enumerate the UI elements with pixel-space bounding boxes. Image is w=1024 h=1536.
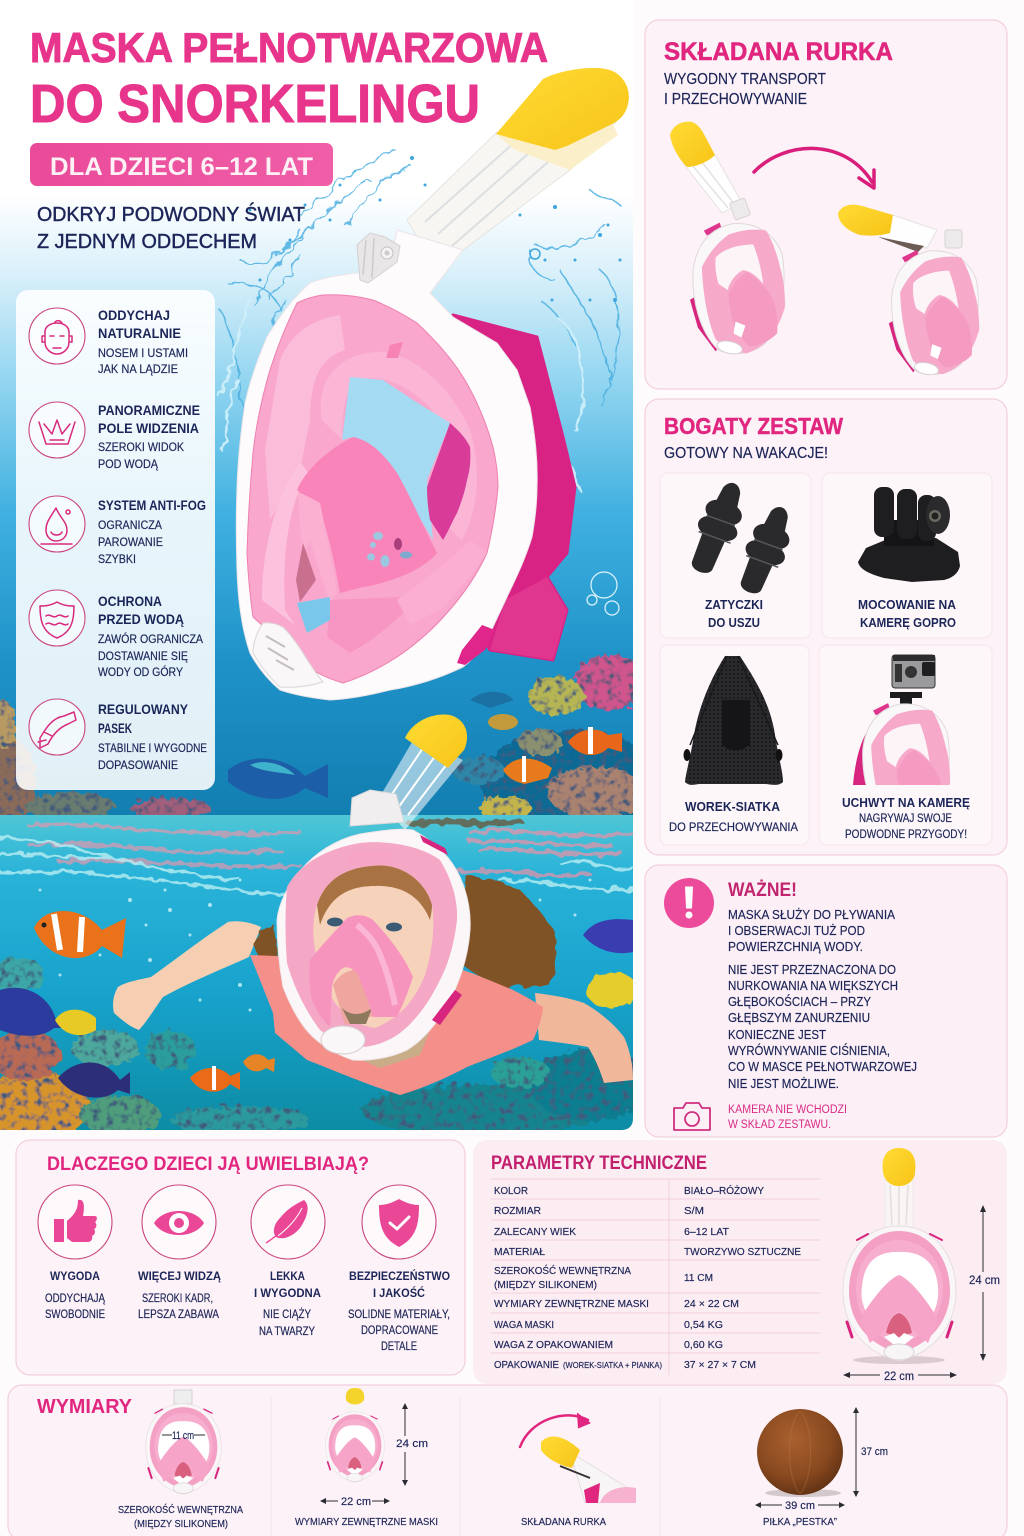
tagline (37, 202, 305, 253)
mask with tube up (670, 122, 785, 356)
card: gopro mount (822, 473, 992, 638)
strap through lens (427, 423, 470, 540)
panel: features (16, 290, 215, 790)
strap (453, 315, 575, 660)
card: mesh bag: DO PRZECHOWYWANIA (669, 820, 798, 834)
nose cup (297, 437, 437, 593)
mouth (333, 970, 373, 1025)
mask front with dimensions (843, 1148, 1000, 1383)
benefit: light: NA TWARZY (259, 1326, 315, 1338)
splash droplets (248, 156, 622, 316)
bubbles near strap (587, 572, 619, 615)
fish: large blue fish (228, 759, 328, 799)
panel: technical parameters (473, 1140, 1007, 1384)
subheading: I PRZECHOWYWANIE (664, 91, 807, 108)
specification table: MATERIAŁ (494, 1246, 545, 1258)
underwater background (0, 214, 633, 815)
fish: clownfish on coral right (568, 727, 622, 755)
subheading: GOTOWY NA WAKACJE! (664, 445, 828, 462)
feature: water protection: DOSTAWANIE SIĘ (98, 651, 188, 663)
card: camera holder: UCHWYT NA KAMERĘ (842, 795, 970, 810)
dark gap (296, 543, 316, 602)
fish: small clownfish (190, 1066, 240, 1092)
benefit: comfort (38, 1185, 112, 1321)
fish silhouette (470, 692, 514, 708)
specification table: WAGA MASKI (494, 1319, 554, 1331)
heading: WAŻNE! (728, 880, 797, 901)
camera note (728, 1104, 847, 1131)
notice text: I OBSERWACJI TUŻ POD (728, 923, 865, 938)
folding illustration: SKŁADANA RURKA (521, 1516, 606, 1528)
eyes (327, 918, 402, 932)
specification table: 0,60 KG (684, 1339, 723, 1351)
feature: breathe (29, 307, 188, 376)
hero image panel (0, 68, 633, 1130)
side of nose cup (298, 492, 337, 603)
feature: anti-fog: SZYBKI (98, 554, 136, 566)
feature: breathe: ODDYCHAJ (98, 307, 170, 323)
feature: strap: DOPASOWANIE (98, 760, 178, 772)
panel: why kids love it (16, 1140, 465, 1375)
tagline: ODKRYJ PODWODNY ŚWIAT (37, 202, 305, 226)
feature: breathe: NATURALNIE (98, 325, 181, 341)
inner width: (MIĘDZY SILIKONEM) (134, 1518, 228, 1530)
fish: dark blue bottom (58, 1062, 130, 1098)
specification table: ZALECANY WIEK (494, 1226, 576, 1238)
notice text (728, 907, 917, 1091)
specification table: 37 × 27 × 7 CM (684, 1359, 756, 1371)
strap clip (457, 625, 495, 665)
panel: folding snorkel (645, 20, 1007, 389)
pink lens rim (286, 842, 457, 1047)
panel: important notice (645, 865, 1007, 1137)
heading: PARAMETRY TECHNICZNE (491, 1153, 707, 1174)
ball: 39 cm (785, 1500, 815, 1512)
inner width (118, 1390, 243, 1530)
ball: PIŁKA „PESTKA” (763, 1516, 837, 1528)
camera (890, 655, 935, 706)
folding illustration (520, 1413, 636, 1528)
fish: yellow right (586, 972, 638, 1008)
notice text: NIE JEST MOŻLIWE. (728, 1076, 839, 1091)
hair in lens (317, 865, 432, 925)
outer dimensions: 22 cm (341, 1496, 371, 1508)
specification table: (WOREK-SIATKA + PIANKA) (563, 1360, 662, 1370)
notice text: NIE JEST PRZEZNACZONA DO (728, 962, 896, 977)
benefit: comfort: SWOBODNIE (45, 1309, 105, 1321)
translucent cap section (496, 122, 618, 170)
feature: anti-fog: OGRANICZA (98, 520, 162, 532)
feature: panorama: POLE WIDZENIA (98, 420, 199, 436)
child hair (253, 875, 557, 987)
specification table: WYMIARY ZEWNĘTRZNE MASKI (494, 1298, 649, 1310)
specification table: 11 CM (684, 1272, 713, 1284)
feature: panorama: SZEROKI WIDOK (98, 442, 184, 454)
blue window (342, 377, 450, 540)
camera note: KAMERA NIE WCHODZI (728, 1104, 847, 1116)
specification table: KOLOR (494, 1185, 528, 1197)
age badge: DLA DZIECI 6–12 LAT (50, 153, 313, 181)
yellow cap (405, 714, 467, 768)
pink lens (247, 295, 498, 683)
specification table: BIAŁO–RÓŻOWY (684, 1184, 764, 1197)
feature: strap: REGULOWANY (98, 701, 189, 717)
outer dimensions: WYMIARY ZEWNĘTRZNE MASKI (295, 1516, 438, 1528)
big mask side view (236, 68, 629, 700)
small striped fish (488, 714, 518, 730)
heading: WYMIARY (37, 1396, 133, 1418)
specification table: SZEROKOŚĆ WEWNĘTRZNA (494, 1264, 631, 1277)
icon: exclamation (664, 878, 714, 928)
card: earplugs (660, 473, 811, 638)
mask with tube folded (838, 205, 979, 377)
camera mount (350, 790, 404, 826)
benefit: light (251, 1185, 325, 1338)
fish: purple right (583, 919, 633, 953)
blue gap (297, 597, 330, 633)
arrow (754, 148, 874, 188)
heading: BOGATY ZESTAW (664, 413, 843, 439)
flower vents (367, 532, 412, 567)
benefit: better view: SZEROKI KADR, (142, 1293, 213, 1305)
feature: anti-fog: SYSTEM ANTI-FOG (98, 497, 206, 513)
notice text: WYRÓWNYWANIE CIŚNIENIA, (728, 1043, 890, 1058)
face (313, 865, 433, 1028)
ball (755, 1407, 888, 1528)
benefit: better view: LEPSZA ZABAWA (138, 1309, 219, 1321)
sea scene below water surface (0, 815, 633, 1135)
specification table: TWORZYWO SZTUCZNE (684, 1246, 801, 1258)
bubbles (38, 878, 592, 1012)
specification table: 6–12 LAT (684, 1226, 730, 1238)
ball: 37 cm (861, 1446, 888, 1458)
feature: anti-fog (29, 496, 206, 566)
notice text: CO W MASCE PEŁNOTWARZOWEJ (728, 1059, 917, 1074)
right bar (397, 540, 487, 625)
heading: SKŁADANA RURKA (664, 38, 893, 66)
fish: purple blue left (0, 988, 62, 1036)
feature: water protection: OCHRONA (98, 593, 162, 609)
lower mask with child (277, 714, 470, 1060)
feature: breathe: JAK NA LĄDZIE (98, 364, 178, 376)
notice text: POWIERZCHNIĄ WODY. (728, 939, 863, 954)
outer dimensions: 24 cm (396, 1438, 428, 1450)
water surface reflections (0, 822, 633, 895)
specification table: WAGA Z OPAKOWANIEM (494, 1339, 613, 1351)
top clip (348, 851, 394, 865)
snorkel tube (407, 122, 616, 275)
camera note: W SKŁAD ZESTAWU. (728, 1119, 831, 1131)
card: camera holder: PODWODNE PRZYGODY! (845, 829, 967, 841)
specification table: OPAKOWANIE (494, 1359, 559, 1371)
clip top (420, 835, 448, 855)
yellow cap (496, 68, 629, 150)
feature: water protection: WODY OD GÓRY (98, 666, 183, 679)
benefit: safety: I JAKOŚĆ (373, 1287, 425, 1300)
specification table: 24 × 22 CM (684, 1298, 739, 1310)
feature: panorama: POD WODĄ (98, 459, 158, 471)
fish: yellow left (55, 1010, 96, 1035)
benefit: safety: BEZPIECZEŃSTWO (349, 1270, 450, 1283)
subheading: WYGODNY TRANSPORT (664, 71, 826, 88)
upper frame band (321, 352, 477, 540)
feature: breathe: NOSEM I USTAMI (98, 348, 188, 360)
lower mask part (327, 597, 403, 653)
strap lower section (490, 577, 567, 660)
card: mesh bag: WOREK-SIATKA (685, 799, 781, 814)
benefit: light: LEKKA (270, 1271, 305, 1283)
card: gopro mount: MOCOWANIE NA (858, 597, 957, 612)
benefit: safety (348, 1185, 450, 1353)
specification table (491, 1179, 820, 1375)
icon: camera (674, 1103, 710, 1130)
tube (383, 742, 463, 829)
mask front with dimensions: 24 cm (969, 1275, 1000, 1287)
nose piece (309, 915, 413, 1027)
notice text: NURKOWANIA NA WIĘKSZYCH (728, 978, 898, 993)
title (30, 24, 548, 134)
coral reef band (0, 653, 633, 815)
card: gopro mount: KAMERĘ GOPRO (860, 615, 956, 630)
panel: dimensions (8, 1385, 1007, 1536)
coral bottom (0, 957, 650, 1139)
heading: DLACZEGO DZIECI JĄ UWIELBIAJĄ? (47, 1153, 369, 1175)
exhaust valve (253, 623, 323, 687)
child arm right (535, 993, 633, 1083)
feature: water protection: ZAWÓR OGRANICZA (98, 633, 203, 646)
feature: strap: PASEK (98, 720, 132, 736)
subheading (664, 71, 826, 108)
specification table: S/M (684, 1205, 704, 1217)
feature: panorama (29, 402, 200, 471)
mask shell (236, 230, 537, 700)
clip right (432, 990, 462, 1025)
camera mount (357, 233, 400, 283)
left seal tube (262, 462, 308, 625)
benefit: light: I WYGODNA (254, 1288, 321, 1300)
feature: strap: STABILNE I WYGODNE (98, 743, 207, 755)
inner width: SZEROKOŚĆ WEWNĘTRZNA (118, 1503, 243, 1516)
benefit: better view (138, 1185, 221, 1321)
child arm left (113, 921, 261, 1030)
benefit: better view: WIĘCEJ WIDZĄ (138, 1271, 221, 1283)
tagline: Z JEDNYM ODDECHEM (37, 231, 257, 253)
title: MASKA PEŁNOTWARZOWA (30, 24, 548, 71)
inner width: 11 cm (172, 1430, 194, 1442)
neck (363, 1032, 430, 1068)
benefit: safety: DOPRACOWANE (361, 1325, 438, 1337)
benefit: safety: SOLIDNE MATERIAŁY, (348, 1309, 450, 1321)
card: camera holder: NAGRYWAJ SWOJE (859, 813, 952, 825)
notice text: MASKA SŁUŻY DO PŁYWANIA (728, 907, 895, 922)
fish: clownfish on coral middle (503, 756, 552, 784)
feature: anti-fog: PAROWANIE (98, 537, 163, 549)
card: earplugs: ZATYCZKI (705, 597, 763, 612)
child shirt (250, 955, 543, 1095)
top connector (386, 342, 403, 358)
notice text: KONIECZNE JEST (728, 1027, 826, 1042)
outer dimensions (295, 1388, 438, 1528)
notice text: GŁĘBOKOŚCIACH – PRZY (728, 994, 871, 1009)
feature: water protection: PRZED WODĄ (98, 611, 184, 627)
fish: clownfish (34, 911, 126, 958)
specification table: 0,54 KG (684, 1319, 723, 1331)
benefit: comfort: ODDYCHAJĄ (45, 1293, 105, 1305)
fish: orange small (243, 1054, 275, 1072)
water splash (218, 150, 620, 490)
feature: water protection (29, 590, 203, 679)
card: camera holder (819, 645, 992, 845)
notice text: GŁĘBSZYM ZANURZENIU (728, 1010, 870, 1025)
title: DO SNORKELINGU (30, 74, 480, 134)
benefit: light: NIE CIĄŻY (263, 1308, 311, 1321)
card: earplugs: DO USZU (708, 615, 760, 630)
left band (265, 315, 345, 520)
age badge (30, 143, 333, 186)
feature: strap (29, 699, 207, 772)
panel: kit (645, 399, 1007, 855)
specification table: ROZMIAR (494, 1205, 541, 1217)
feature: panorama: PANORAMICZNE (98, 402, 200, 418)
benefit: comfort: WYGODA (50, 1271, 100, 1283)
valve (321, 1026, 365, 1054)
benefit: safety: DETALE (381, 1341, 417, 1353)
specification table: (MIĘDZY SILIKONEM) (494, 1279, 597, 1291)
card: mesh bag (660, 645, 809, 845)
mask shell (277, 829, 470, 1060)
mask front with dimensions: 22 cm (884, 1371, 914, 1383)
